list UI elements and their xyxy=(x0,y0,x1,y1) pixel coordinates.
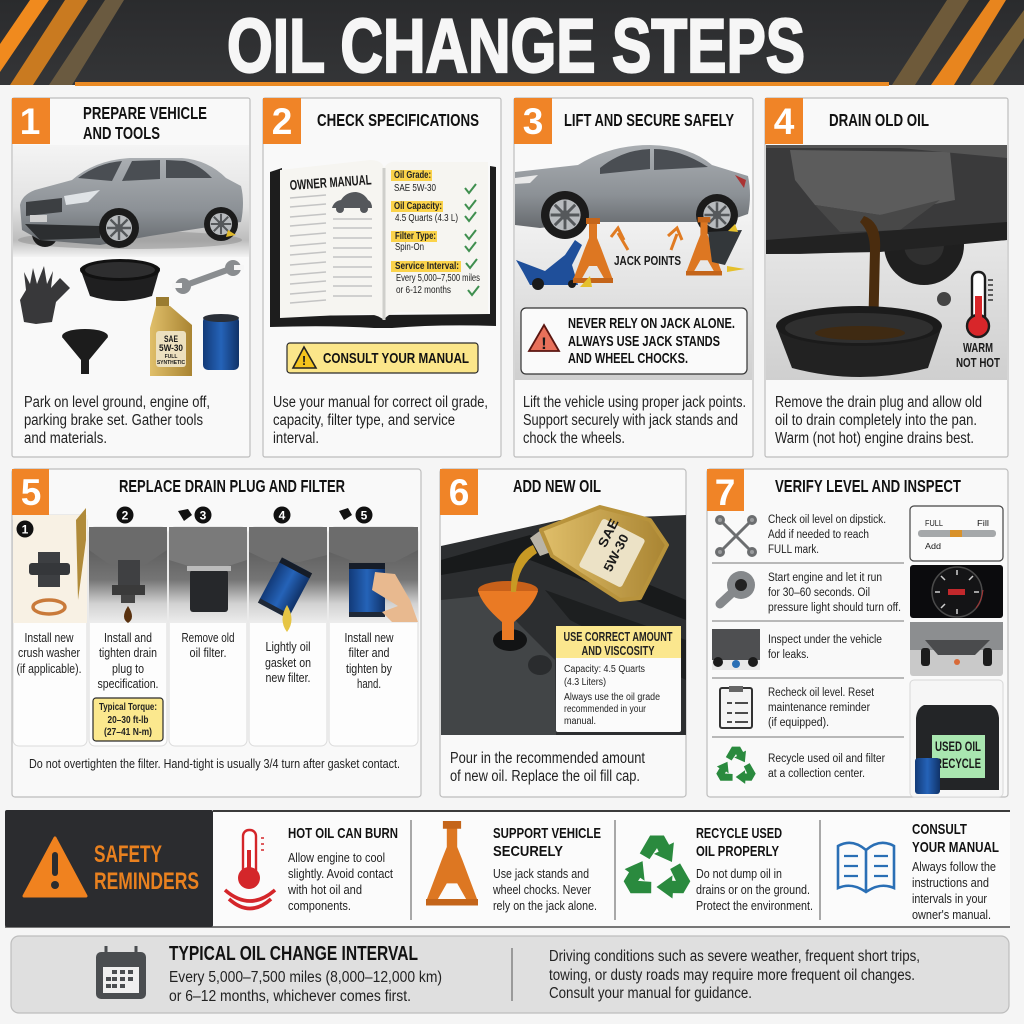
row text: Check oil level on dipstick. xyxy=(768,514,886,526)
warning callout: AND WHEEL CHOCKS. xyxy=(568,350,688,367)
reminder: support vehicle: SECURELY xyxy=(493,843,563,860)
callout: correct amount: (4.3 Liters) xyxy=(564,677,606,688)
step number: 7 xyxy=(715,472,735,513)
sub-step captions: oil filter. xyxy=(190,646,226,660)
sub-step captions: specification. xyxy=(98,677,158,691)
step number: 3 xyxy=(523,101,543,142)
check marks xyxy=(465,184,479,295)
sub-step captions: new filter. xyxy=(266,671,310,685)
specification highlights xyxy=(391,170,461,272)
sub-step captions: gasket on xyxy=(265,656,311,670)
step number: 5 xyxy=(21,472,41,513)
warning callout: ALWAYS USE JACK STANDS xyxy=(568,333,720,350)
callout: correct amount: Always use the oil grade xyxy=(564,692,660,703)
icon: open owner manual: Filter Type: xyxy=(395,231,436,242)
driving conditions note: Driving conditions such as severe weather, frequent short trips, xyxy=(549,948,920,965)
icon: orange funnel xyxy=(478,581,538,640)
description: Lift the vehicle using proper jack points. xyxy=(523,394,746,411)
thumbnail: dipstick: FULL xyxy=(925,519,944,528)
row text: pressure light should turn off. xyxy=(768,602,901,614)
sub-step captions: filter and xyxy=(348,646,390,660)
icon: oil bottle: FULL xyxy=(165,354,177,360)
step number xyxy=(12,469,49,515)
sub-step captions: crush washer xyxy=(18,646,80,660)
row text: maintenance reminder xyxy=(768,702,870,714)
icon: open owner manual: or 6-12 months xyxy=(396,285,451,296)
sub-step cards xyxy=(13,515,418,746)
icon: recycle xyxy=(619,836,696,902)
label: warm not hot: WARM xyxy=(963,341,993,355)
heading: ADD NEW OIL xyxy=(513,476,601,496)
car photo background xyxy=(13,145,249,257)
step number xyxy=(263,98,301,144)
icon: under vehicle thumbnail xyxy=(712,629,760,670)
sub-step captions: (if applicable). xyxy=(16,662,82,676)
driving conditions note: towing, or dusty roads may require more frequent oil changes. xyxy=(549,967,915,984)
panel: typical oil change interval xyxy=(11,936,1009,1013)
jack point arrows xyxy=(611,228,682,250)
torque callout: (27–41 N-m) xyxy=(104,726,152,738)
warning callout xyxy=(521,308,747,374)
icon: drain pan xyxy=(776,306,942,377)
label: jack points: JACK POINTS xyxy=(614,253,681,268)
oil pour stream xyxy=(511,545,537,592)
panel: step 5 replace drain plug and filter: 1 xyxy=(22,522,29,536)
icon: tilted oil bottle: SAE xyxy=(595,516,622,550)
sub-step captions: Install new xyxy=(344,631,394,645)
reminder: support vehicle xyxy=(492,825,601,913)
sub-step captions: Install new xyxy=(24,631,74,645)
panel: step 4 drain old oil xyxy=(765,98,1008,457)
torque callout: Typical Torque: xyxy=(99,701,157,713)
icon: grey car front view xyxy=(18,158,243,249)
heading: VERIFY LEVEL AND INSPECT xyxy=(775,476,961,496)
description: Use your manual for correct oil grade, xyxy=(273,394,488,411)
panel: step 6 add new oil xyxy=(440,469,686,797)
reminder: recycle xyxy=(696,825,813,913)
safety title block: SAFETY xyxy=(94,841,162,868)
step number: 2 xyxy=(272,101,292,142)
callout: correct amount xyxy=(556,626,681,732)
reminder: consult manual: CONSULT xyxy=(912,821,967,838)
row text: Add if needed to reach xyxy=(768,529,869,541)
sub-step 2 image: drain plug xyxy=(89,527,167,623)
icon: hot thermometer xyxy=(225,830,275,908)
icon: open owner manual: Every 5,000–7,500 miles xyxy=(396,273,480,284)
icon: oil pan xyxy=(80,259,160,301)
sub-step captions: tighten drain xyxy=(99,646,157,660)
icon: ignition key xyxy=(720,571,755,604)
sub-step number badges xyxy=(16,506,372,538)
icon: oil bottle: SYNTHETIC xyxy=(157,360,186,366)
icon: oil filter xyxy=(203,314,239,370)
row text: Recheck oil level. Reset xyxy=(768,687,875,699)
interval heading: TYPICAL OIL CHANGE INTERVAL xyxy=(169,943,418,965)
icon: gloves xyxy=(20,266,70,324)
icon: calendar xyxy=(96,946,146,999)
sub-step captions xyxy=(16,631,394,691)
torque callout: 20–30 ft-lb xyxy=(108,714,148,726)
sub-step captions: Remove old xyxy=(182,631,234,645)
interval text xyxy=(169,969,442,1005)
reminder: recycle: drains or on the ground. xyxy=(696,883,810,897)
step number xyxy=(514,98,552,144)
icon: jack stand xyxy=(426,821,478,906)
icon: open owner manual: OWNER MANUAL xyxy=(289,171,372,193)
icon: open owner manual: Service Interval: xyxy=(395,261,459,272)
reminder: hot oil: slightly. Avoid contact xyxy=(288,867,393,881)
callout: correct amount: manual. xyxy=(564,716,596,727)
torque callout xyxy=(93,698,163,741)
icon: open owner manual: Spin-On xyxy=(395,242,424,253)
description xyxy=(523,394,746,447)
thumbnail: dashboard xyxy=(910,565,1003,618)
label: warm not hot xyxy=(956,341,1000,370)
row text: FULL mark. xyxy=(768,544,819,556)
icon: removed drain plug xyxy=(937,292,951,306)
panel: step 5 replace drain plug and filter xyxy=(12,469,421,797)
step number: 6 xyxy=(449,472,469,513)
engine bay photo xyxy=(441,515,686,735)
description xyxy=(450,750,646,785)
description: Remove the drain plug and allow old xyxy=(775,394,982,411)
icon: open owner manual: Oil Grade: xyxy=(394,170,431,181)
sub-step 3 image: old filter xyxy=(169,527,247,623)
row text: for leaks. xyxy=(768,649,809,661)
heading: AND TOOLS xyxy=(83,123,160,143)
panel: step 1 prepare vehicle and tools xyxy=(12,98,250,457)
reminder: recycle: Protect the environment. xyxy=(696,899,813,913)
description: of new oil. Replace the oil fill cap. xyxy=(450,768,640,785)
heading: CHECK SPECIFICATIONS xyxy=(317,110,479,130)
note: Do not overtighten the filter. Hand-tight is usually 3/4 turn after gasket contact. xyxy=(29,757,400,771)
description xyxy=(273,394,488,447)
interval text: Every 5,000–7,500 miles (8,000–12,000 km) xyxy=(169,969,442,986)
step number xyxy=(440,469,478,515)
description: capacity, filter type, and service xyxy=(273,412,455,429)
under-car photo xyxy=(766,145,1007,380)
thumbnail: used oil recycle container xyxy=(910,680,1003,797)
icon: open owner manual: Oil Capacity: xyxy=(394,201,442,212)
row text: Start engine and let it run xyxy=(768,572,882,584)
row text: Recycle used oil and filter xyxy=(768,753,885,765)
panel: safety reminders xyxy=(5,810,1010,928)
thumbnail: dipstick: Add xyxy=(925,542,941,551)
heading: LIFT AND SECURE SAFELY xyxy=(564,110,734,130)
icon: jack stands xyxy=(573,217,722,283)
interval text: or 6–12 months, whichever comes first. xyxy=(169,988,411,1005)
heading: REPLACE DRAIN PLUG AND FILTER xyxy=(119,476,345,496)
reminder: consult manual: YOUR MANUAL xyxy=(912,839,999,856)
icon: blue floor jack xyxy=(516,240,582,290)
panel: step 5 replace drain plug and filter: 2 xyxy=(122,508,129,522)
icon: wrench xyxy=(172,260,244,294)
oil stream xyxy=(860,216,880,338)
warning callout: ! xyxy=(541,334,547,353)
reminder: consult manual: owner's manual. xyxy=(912,908,991,922)
thumbnail: dipstick xyxy=(910,506,1003,561)
reminder: support vehicle: wheel chocks. Never xyxy=(492,883,591,897)
description: interval. xyxy=(273,430,319,447)
callout: correct amount: AND VISCOSITY xyxy=(582,644,655,658)
icon: open owner manual: SAE 5W-30 xyxy=(394,183,436,194)
description: Support securely with jack stands and xyxy=(523,412,738,429)
safety title block: REMINDERS xyxy=(94,868,199,895)
sub-step 1 image: plug and washer xyxy=(13,508,87,623)
panel: step 5 replace drain plug and filter: 5 xyxy=(361,508,368,522)
reminder: support vehicle: Use jack stands and xyxy=(493,867,589,881)
reminder: hot oil: HOT OIL CAN BURN xyxy=(288,825,398,842)
icon: thermometer xyxy=(967,272,993,337)
reminder: consult manual: instructions and xyxy=(912,876,989,890)
description: chock the wheels. xyxy=(523,430,625,447)
description: parking brake set. Gather tools xyxy=(24,412,203,429)
thumbnail: leak inspection xyxy=(910,622,1003,676)
heading: PREPARE VEHICLE xyxy=(83,103,207,123)
icon: open owner manual xyxy=(270,160,496,328)
icon: oil bottle: SAE xyxy=(164,334,178,344)
sub-step captions: Lightly oil xyxy=(266,640,310,654)
row text xyxy=(768,514,901,780)
icon: open owner manual: 4.5 Quarts (4.3 L) xyxy=(395,213,458,224)
lifted car scene background xyxy=(515,200,752,380)
reminder: recycle: OIL PROPERLY xyxy=(696,843,779,860)
description: and materials. xyxy=(24,430,107,447)
row text: Inspect under the vehicle xyxy=(768,634,882,646)
callout: consult your manual: CONSULT YOUR MANUAL xyxy=(323,350,469,367)
reminder: hot oil xyxy=(287,825,398,913)
panel: step 5 replace drain plug and filter: 3 xyxy=(200,508,207,522)
thumbnail: dipstick: Fill xyxy=(977,519,989,528)
icon: tilted oil bottle: 5W-30 xyxy=(600,532,632,574)
reminder: hot oil: Allow engine to cool xyxy=(288,851,385,865)
reminder: consult manual: intervals in your xyxy=(912,892,987,906)
panel: step 2 check specifications xyxy=(263,98,501,457)
panel: step 3 lift and secure safely xyxy=(514,98,753,457)
panel: step 7 verify level and inspect xyxy=(707,469,1008,797)
thumbnail: used oil recycle container: RECYCLE xyxy=(935,756,981,771)
callout: consult your manual: ! xyxy=(302,353,306,368)
step number: 1 xyxy=(20,101,40,142)
icon: oil bottle: 5W-30 xyxy=(159,343,183,353)
icon: blue book xyxy=(838,843,894,892)
icon: funnel xyxy=(62,329,108,374)
description: Pour in the recommended amount xyxy=(450,750,646,767)
sub-step captions: plug to xyxy=(112,662,144,676)
thumbnail: used oil recycle container: USED OIL xyxy=(935,739,981,754)
description xyxy=(775,394,982,447)
step number xyxy=(765,98,803,144)
reminder: recycle: Do not dump oil in xyxy=(696,867,782,881)
row text: at a collection center. xyxy=(768,768,865,780)
label: warm not hot: NOT HOT xyxy=(956,356,1000,370)
panel: step 5 replace drain plug and filter: 4 xyxy=(279,508,286,522)
title: OIL CHANGE STEPS xyxy=(227,4,805,89)
icon: crossed tools xyxy=(716,516,756,556)
callout: correct amount: recommended in your xyxy=(564,704,647,715)
row text: for 30–60 seconds. Oil xyxy=(768,587,870,599)
sub-step 4 image: new filter tilted xyxy=(249,527,327,632)
reminder: consult manual: Always follow the xyxy=(912,860,996,874)
reminder: support vehicle: rely on the jack alone. xyxy=(493,899,597,913)
row text: (if equipped). xyxy=(768,717,829,729)
sub-step captions: hand. xyxy=(357,677,381,691)
safety title block xyxy=(5,810,213,927)
icon: wheel chock and black jack xyxy=(580,224,745,287)
driving conditions note xyxy=(549,948,920,1002)
driving conditions note: Consult your manual for guidance. xyxy=(549,985,752,1002)
description xyxy=(24,394,210,447)
sub-step 5 image: hand fitting filter xyxy=(329,527,418,623)
reminder: hot oil: with hot oil and xyxy=(287,883,362,897)
reminder: hot oil: components. xyxy=(288,899,351,913)
step number: 4 xyxy=(774,101,795,142)
warning callout: NEVER RELY ON JACK ALONE. xyxy=(568,315,735,332)
heading xyxy=(83,103,207,143)
icon: car in manual xyxy=(332,192,372,213)
reminder: consult manual xyxy=(912,821,999,922)
reminder: support vehicle: SUPPORT VEHICLE xyxy=(493,825,601,842)
step number xyxy=(707,469,744,513)
icon: tilted oil bottle xyxy=(530,507,667,600)
description: Park on level ground, engine off, xyxy=(24,394,210,411)
callout: correct amount: Capacity: 4.5 Quarts xyxy=(564,664,645,675)
sub-step captions: Install and xyxy=(104,631,152,645)
icon: recycle small xyxy=(713,747,759,786)
header banner xyxy=(0,0,1024,89)
icon: clipboard checklist xyxy=(720,686,752,728)
sub-step captions: tighten by xyxy=(346,662,393,676)
description: Warm (not hot) engine drains best. xyxy=(775,430,974,447)
callout: correct amount: USE CORRECT AMOUNT xyxy=(564,630,673,644)
step number xyxy=(12,98,50,144)
description: oil to drain completely into the pan. xyxy=(775,412,977,429)
icon: lifted grey car xyxy=(515,145,750,239)
heading: DRAIN OLD OIL xyxy=(829,110,929,130)
icon: oil bottle xyxy=(150,297,192,376)
reminder: recycle: RECYCLE USED xyxy=(696,825,782,842)
callout: consult your manual xyxy=(287,343,478,373)
